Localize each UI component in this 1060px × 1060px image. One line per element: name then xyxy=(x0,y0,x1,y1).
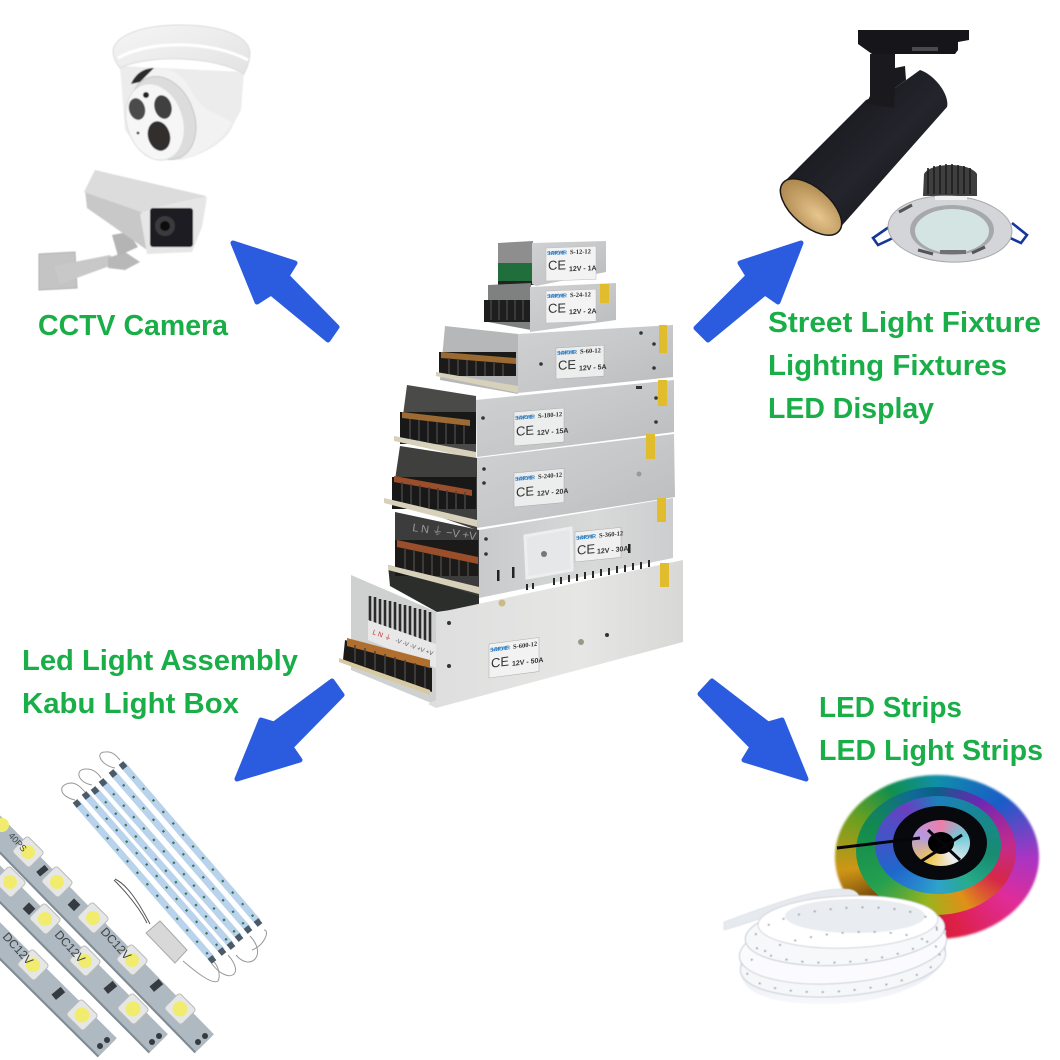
icon: large LED light bars xyxy=(0,818,208,1049)
unit: S-240-12: S-240-12 xyxy=(538,472,562,481)
icon: recessed downlight xyxy=(873,164,1027,265)
icon: bullet surveillance camera xyxy=(39,170,207,290)
unit: S-12-12 xyxy=(498,241,606,286)
arrow: to LED strips xyxy=(700,681,806,779)
text block: lighting applications: Lighting Fixtures xyxy=(768,350,1007,382)
unit: S-60-12: CE xyxy=(558,357,576,373)
text block: light assembly applications xyxy=(22,645,298,720)
product stack: switching power supplies xyxy=(339,241,683,708)
unit: S-360-12: CE xyxy=(577,541,595,558)
unit: S-24-12: S-24-12 xyxy=(570,291,591,299)
unit: S-180-12: SHANPOWER xyxy=(515,414,535,422)
unit: S-180-12: CE xyxy=(516,422,534,439)
icon: white LED strip coil xyxy=(724,889,950,1005)
unit: S-240-12 xyxy=(384,434,675,530)
unit: S-24-12: CE xyxy=(548,300,566,316)
unit: S-60-12: S-60-12 xyxy=(580,347,601,356)
arrow: to CCTV camera xyxy=(233,243,337,340)
unit: S-360-12 xyxy=(388,498,673,598)
unit: S-600-12: 12V - 50A xyxy=(512,657,543,668)
unit: S-600-12 body behind: L N ⏚ xyxy=(371,628,392,643)
text block: LED strip applications xyxy=(819,692,1043,767)
unit: S-60-12 xyxy=(436,325,673,394)
unit: S-240-12: SHANPOWER xyxy=(515,475,535,483)
unit: S-24-12: SHANPOWER xyxy=(547,293,567,300)
unit: S-360-12: S-360-12 xyxy=(599,530,623,540)
text block: lighting applications xyxy=(768,307,1041,425)
text block: lighting applications: LED Display xyxy=(768,393,934,425)
unit: S-60-12: SHANPOWER xyxy=(557,350,577,357)
unit: S-24-12: 12V - 2A xyxy=(569,308,597,316)
icon: black track spotlight xyxy=(771,30,969,246)
text block: light assembly applications: Led Light Assembly xyxy=(22,645,298,677)
unit: S-180-12: 12V - 15A xyxy=(537,428,568,437)
unit: S-180-12 xyxy=(394,380,674,459)
icon: RGB LED strip reel xyxy=(830,770,1050,950)
icon: large LED light bars: DC12V xyxy=(0,930,36,968)
icon: dome security camera xyxy=(113,25,250,169)
text block: LED strip applications: LED Light Strips xyxy=(819,735,1043,767)
unit: S-600-12 body behind xyxy=(351,565,479,705)
unit: S-600-12: CE xyxy=(491,653,509,671)
label: CCTV Camera: CCTV Camera xyxy=(38,310,229,342)
arrow: to LED light assembly xyxy=(237,681,342,779)
unit: S-24-12 xyxy=(484,283,616,332)
unit: S-600-12: SHANPOWER xyxy=(490,645,510,654)
unit: S-360-12: L N ⏚ −V +V xyxy=(412,521,478,543)
unit: S-12-12: SHANPOWER xyxy=(547,250,567,257)
unit: S-12-12: S-12-12 xyxy=(570,248,591,256)
arrow: to lighting fixtures xyxy=(696,243,801,340)
unit: S-60-12: 12V - 5A xyxy=(579,364,607,373)
unit: S-600-12 body behind: -V -V -V +V +V xyxy=(394,638,434,657)
unit: S-360-12: 12V - 30A xyxy=(597,546,628,556)
unit: S-360-12: SHANPOWER xyxy=(576,534,596,542)
icon: large LED light bars: DC12V xyxy=(52,928,88,966)
text block: LED strip applications: LED Strips xyxy=(819,692,962,724)
unit: S-12-12: CE xyxy=(548,257,566,273)
unit: S-240-12: 12V - 20A xyxy=(537,488,568,498)
unit: S-600-12 xyxy=(339,560,683,708)
icon: large LED light bars: DC12V xyxy=(98,925,134,963)
icon: thin LED module bars with driver xyxy=(62,752,267,982)
icon: large LED light bars: 40PS xyxy=(7,831,29,854)
unit: S-180-12: S-180-12 xyxy=(538,411,562,420)
unit: S-12-12: 12V - 1A xyxy=(569,265,597,273)
text block: lighting applications: Street Light Fixture xyxy=(768,307,1041,339)
unit: S-240-12: CE xyxy=(516,483,534,500)
unit: S-600-12: S-600-12 xyxy=(513,641,537,651)
text block: light assembly applications: Kabu Light Box xyxy=(22,688,239,720)
